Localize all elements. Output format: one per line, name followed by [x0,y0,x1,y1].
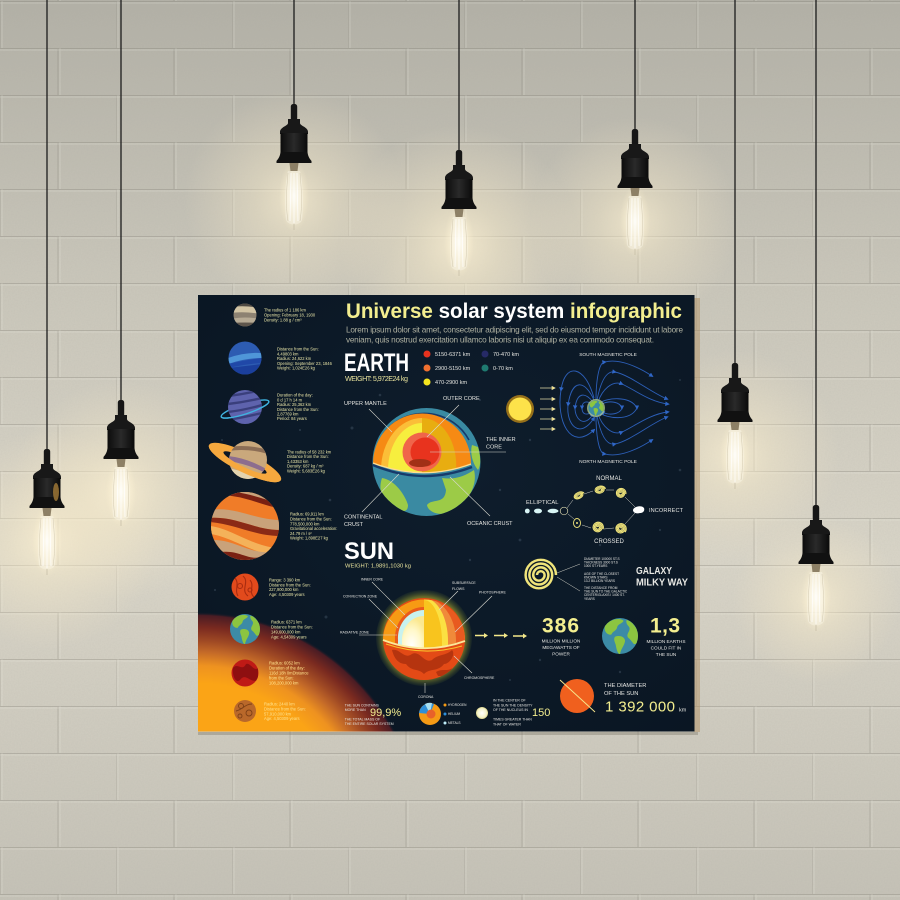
pie legend: HELIUM [448,712,460,716]
label: continental crust [344,474,399,528]
uranus facts: Distance from the Sun: [277,407,319,412]
galaxy facts: KNOWN STARS [584,576,608,580]
density fact [493,698,550,726]
galaxy milky way heading: MILKY WAY [636,578,688,588]
sun diameter fact: THE DIAMETER [604,683,646,689]
sun diameter fact: km [679,708,687,714]
label: the inner core: CORE [486,444,502,450]
label: oceanic crust: OCEANIC CRUST [467,521,513,527]
intro paragraph: Lorem ipsum dolor sit amet, consectetur adipiscing elit, sed do eiusmod tempor incididunt ut labore [346,326,683,334]
galaxy milky way heading [636,566,688,588]
stat: 1,3: 1,3 [650,615,680,638]
earth facts: Age: 4,54309 years [271,634,307,639]
poster panel [198,295,694,732]
earth layer legend: 2900-5150 km [435,366,471,372]
title: Universe solar system infographic [346,300,682,323]
neptune facts: Distance from the Sun: [277,346,319,352]
label: convection zone [343,594,398,628]
stat: 386: MILLION MILLION [542,638,580,644]
label: subsurface flows: SUBSURFACE [452,581,476,585]
sun composition pie chart [419,703,441,725]
earth layer legend: 5150-6371 km [435,352,471,358]
earth facts: Radius: 6371 km [271,620,302,624]
mercury facts [264,702,306,721]
planet: neptune [228,342,262,376]
density fact: THAT OF WATER [493,722,521,726]
label: upper mantle [344,401,392,432]
hanging lamp 1 [30,0,64,577]
mars facts: 227,900,000 km [269,587,299,592]
hanging lamp 4 [442,0,476,278]
stat: 1,3: THE SUN [656,652,676,657]
venus facts: from the Sun: [269,675,294,680]
density fact: IN THE CENTER OF [493,698,526,702]
planet: jupiter [210,492,280,564]
galaxy facts [584,557,628,601]
stat: 1,3 [646,615,686,657]
mercury facts: Distance from the Sun: [264,706,306,712]
label: the inner core: THE INNER [486,437,516,443]
galaxy facts: 1000 ST.YEARS [584,564,607,568]
pluto facts [264,308,316,322]
jupiter facts: Weight: 1,898E27 kg [290,536,329,540]
mars facts [269,578,311,597]
mercury facts: Radius: 2440 km [264,702,295,706]
label: chromosphere: CHROMOSPHERE [464,676,495,680]
magnetic field diagram [560,361,668,455]
label: continental crust: CRUST [344,522,364,528]
venus facts: 108,200,000 km [269,680,299,685]
label: photosphere: PHOTOSPHERE [479,590,506,594]
label: radiative zone: RADIATIVE ZONE [340,630,370,634]
sun cross-section diagram [376,590,472,686]
sun mass fact: THE SUN CONTAINS [345,703,380,707]
hanging lamp 7 [798,0,834,633]
venus facts: Radius: 6052 km [269,660,300,666]
arrows to sun power [475,633,527,638]
label: inner core: INNER CORE [361,578,384,582]
sun diameter fact [604,683,687,716]
stat: 1,3: MILLION EARTHS [646,639,686,644]
jupiter facts: 778,500,000 km [290,521,320,526]
label: the inner core [430,437,516,452]
planet: mars [232,574,258,600]
earth facts: 149,600,000 km [271,629,301,634]
label: outer core [427,396,480,437]
density fact: 150 [532,707,550,719]
icon: sun diameter [560,679,595,713]
uranus facts: Duration of the day: [277,392,313,398]
hanging lamp 5 [618,0,652,257]
label: south magnetic pole: SOUTH MAGNETIC POLE [579,352,637,358]
earth cross-section diagram [372,408,480,516]
venus facts: Duration of the day: [269,666,305,670]
uranus facts: Period: 84 years [277,416,307,421]
stat: 1,3: COULD FIT IN [651,646,681,650]
saturn facts: Distance from the Sun: [287,454,329,459]
sun diameter fact: 1 392 000 [605,699,675,716]
venus facts: 116d 18h 0mDistance [269,670,309,675]
venus facts [269,660,309,685]
neptune facts: 4,49803 km [277,351,299,356]
planet: mercury [234,700,256,722]
sun mass fact: MORE THAN [345,708,366,712]
hanging lamp 3 [276,0,312,232]
sun weight: WEIGHT: 1,9891,1030 kg [345,564,411,570]
label: corona: CORONA [418,695,434,699]
galaxy milky way heading: GALAXY [636,566,672,577]
icon: nucleus [476,707,488,719]
pie legend [444,703,467,725]
galaxy facts: AGE OF THE CLOSEST [584,572,619,576]
neptune facts: Radius: 24,622 km [277,356,312,361]
earth layer legend: 470-2900 km [435,380,468,386]
earth facts: Distance from the Sun: [271,624,313,630]
planet: uranus [220,390,270,424]
stat: 386: MEGAWATTS OF [542,645,580,650]
sun mass fact: THE ENTIRE SOLAR SYSTEM [345,722,394,726]
density fact: THE SUN THE DENSITY [493,703,533,707]
earth layer legend: 70-470 km [493,352,519,358]
intro paragraph: veniam, quis nostrud exercitation ullamco laboris nisi ut aliquip ex ea commodo consequat. [346,335,654,344]
galaxy facts: DIAMETER 100000 ST.S [584,557,620,561]
density fact: OF THE NUCLEUS IN [493,708,528,712]
density fact: TIMES GREATER THAN [493,718,532,722]
label: outer core: OUTER CORE [443,396,480,402]
label: corona [418,683,434,699]
neptune facts [277,346,333,370]
label: photosphere [455,590,506,632]
galaxy facts: THE DISTANCE FROM [584,586,618,590]
label: radiative zone [340,630,397,635]
sun mass fact: 99,9% [370,707,401,719]
label: subsurface flows: FLOWS [452,587,465,591]
stat: 386: 386 [542,615,579,638]
pie legend: HYDROGEN [448,703,467,707]
earth layer legend: 0-70 km [493,366,513,372]
pie legend: METALS [448,721,461,725]
saturn facts: 1,43353 km [287,459,309,464]
label: upper mantle: UPPER MANTLE [344,401,387,407]
saturn facts: Density: 687 kg / m³ [287,464,324,469]
mars facts: Range: 3 390 km [269,578,301,582]
earth heading: EARTH [344,349,409,377]
uranus facts: 0 d 17 h 14 m [277,397,303,402]
intro paragraph [346,326,683,344]
uranus facts [277,392,319,421]
label: chromosphere [454,656,495,680]
label: crossed: CROSSED [594,539,625,545]
label: normal: NORMAL [596,476,622,482]
saturn facts [287,450,332,473]
pluto facts: Density: 1.88 g / cm³ [264,317,302,322]
mars facts: Age: 4,50309 years [269,592,305,597]
saturn facts: The radius of 58 232 km [287,450,332,454]
sun heading: SUN [344,538,394,565]
jupiter facts: Gravitational acceleration: [290,526,337,531]
jupiter facts [290,512,337,540]
galaxy facts: THE SUN TO THE GALACTIC [584,590,628,594]
label: convection zone: CONVECTION ZONE [343,594,378,598]
sun emitting solar wind [506,386,555,430]
icon: earth globe [602,618,639,654]
label: oceanic crust [450,477,513,527]
earth layer legend [424,350,519,386]
neptune facts: Weight: 1,024E26 kg [277,366,316,370]
saturn facts: Weight: 5,683E26 kg [287,468,326,473]
mars facts: Distance from the Sun: [269,582,311,587]
hanging lamp 2 [104,0,138,528]
jupiter facts: 24.79 m / s² [290,531,312,536]
label: incorrect: INCORRECT [649,508,684,514]
label: inner core [361,578,405,615]
icon: milky way spiral [526,560,580,591]
stat: 386: POWER [552,651,570,656]
mercury facts: Age: 4,50309 years [264,716,300,721]
earth facts [271,620,313,639]
hanging lamp 6 [718,0,752,491]
galaxy facts: YEARS [584,597,595,601]
jupiter facts: Radius: 69,911 km [290,512,324,516]
earth weight: WEIGHT: 5,972E24 kg [345,374,408,383]
planet: pluto [234,304,256,326]
galaxy facts: THICKNESS 3000 ST.S [584,560,618,564]
mercury facts: 57,910,000 km [264,712,292,716]
neptune facts: Opening: September 23, 1846 [277,361,333,366]
label: north magnetic pole: NORTH MAGNETIC POLE [579,459,637,465]
label: subsurface flows [439,581,476,610]
planet: venus [232,660,258,686]
sun mass fact: THE TOTAL MASS OF [345,717,380,721]
uranus facts: Radius: 25,362 km [277,402,312,407]
uranus facts: 2,87769 km [277,412,299,416]
sun diameter fact: OF THE SUN [604,691,638,697]
galaxy facts: 13.2 BILLION YEARS [584,579,615,583]
sun mass fact [345,703,401,726]
label: continental crust: CONTINENTAL [344,514,382,520]
galaxy facts: CENTER/GLAXIS I 1400 ST. [584,593,625,597]
stat: 386 [542,615,580,656]
planet: earth [230,614,261,644]
galaxy classification diagram [525,485,644,536]
pluto facts: Opening: February 18, 1930 [264,312,316,318]
label: elliptical: ELLIPTICAL [526,500,559,506]
jupiter facts: Distance from the Sun: [290,516,332,521]
pluto facts: The radius of 1 186 km [264,308,306,312]
planet: saturn [208,441,282,482]
